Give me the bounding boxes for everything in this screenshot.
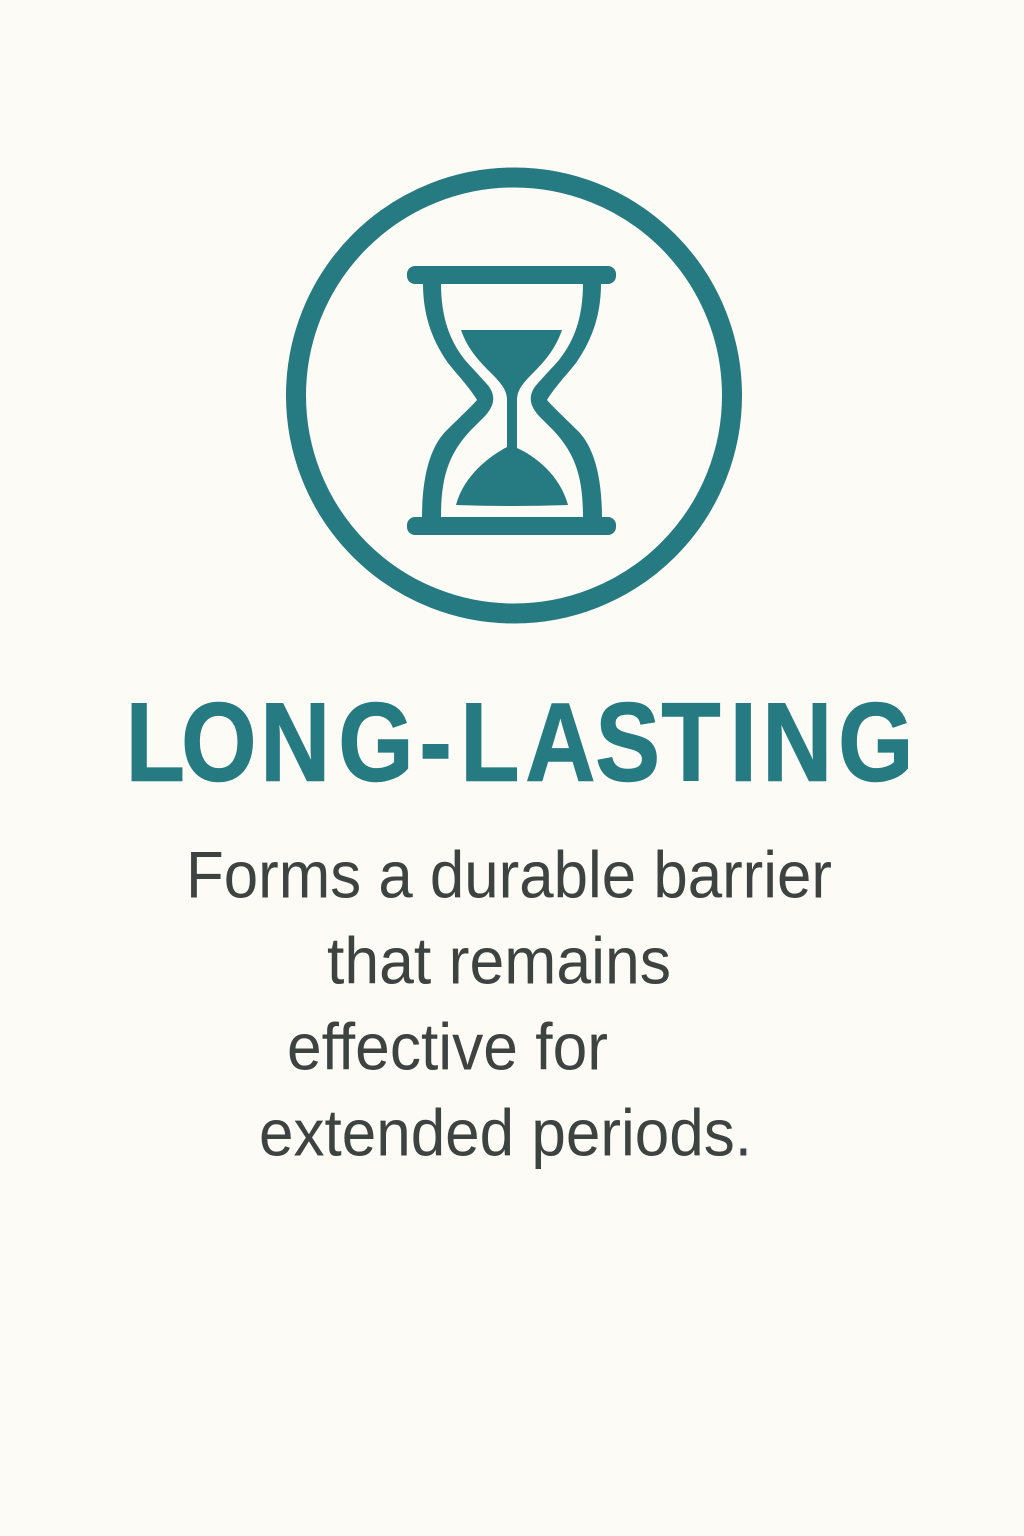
description line 2: that remains bbox=[327, 924, 671, 998]
title: LONG-LASTING bbox=[126, 681, 913, 805]
icon: hourglass in circle bbox=[296, 178, 732, 614]
hourglass sand bbox=[456, 330, 568, 506]
description line 3: effective for bbox=[287, 1010, 608, 1084]
description text block bbox=[186, 838, 832, 1170]
hourglass left wall bbox=[422, 283, 493, 518]
hourglass bottom bar bbox=[407, 517, 616, 535]
hourglass bbox=[407, 266, 616, 535]
description line 4: extended periods. bbox=[259, 1096, 752, 1170]
hourglass top bar bbox=[407, 266, 616, 284]
hourglass right wall bbox=[531, 283, 602, 518]
icon ring bbox=[296, 178, 732, 614]
description line 1: Forms a durable barrier bbox=[186, 838, 832, 912]
